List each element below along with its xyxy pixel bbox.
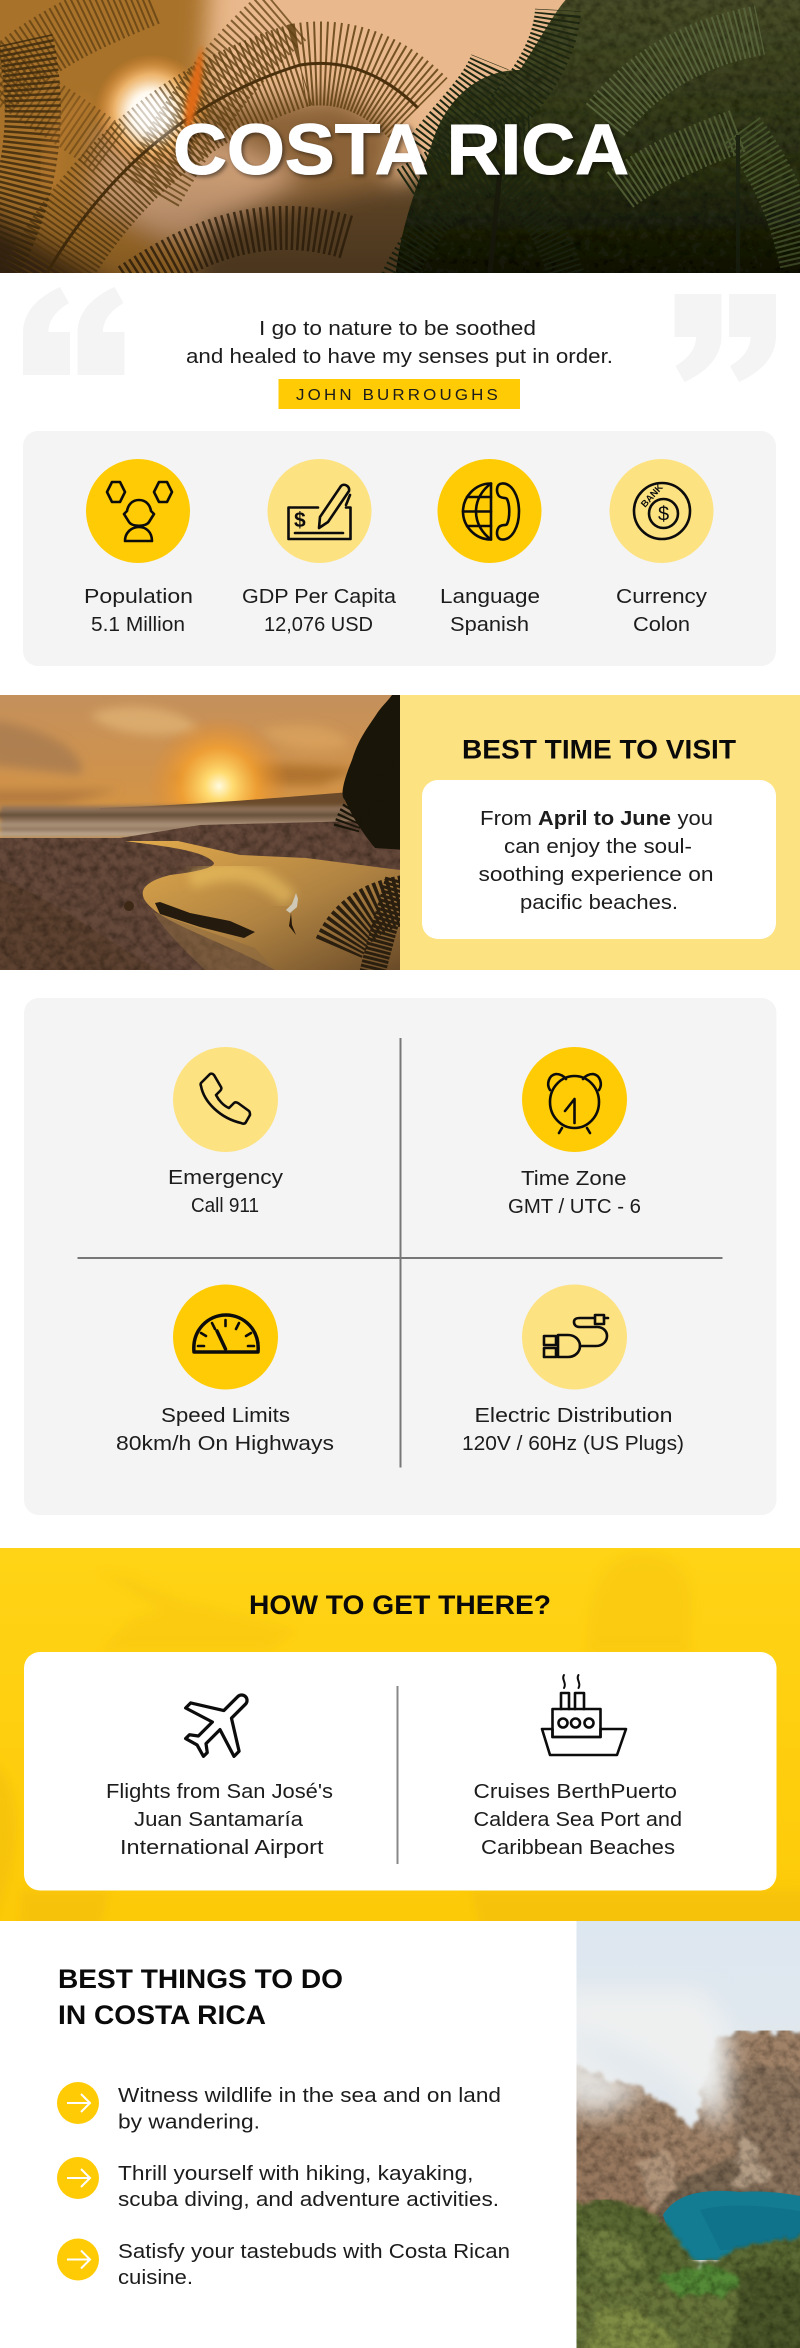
heading: best things to do — [58, 1964, 343, 2030]
icon: arrow — [67, 2094, 90, 2112]
transport: flights: Juan Santamaría — [134, 1809, 304, 1831]
fact: language — [438, 459, 542, 636]
transport: cruises: Cruises BerthPuerto — [474, 1781, 677, 1803]
info: speed limits: 80km/h On Highways — [116, 1433, 334, 1455]
quote author tag — [278, 379, 520, 409]
fact: GDP: 12,076 USD — [264, 614, 373, 636]
icon: globe and phone — [463, 483, 519, 540]
transport: flights: International Airport — [120, 1837, 324, 1859]
panel: best time to visit — [400, 695, 800, 970]
mountain — [576, 2030, 800, 2230]
transport: cruises: Caribbean Beaches — [481, 1837, 675, 1859]
distant headland — [100, 792, 348, 810]
fact: GDP: GDP Per Capita — [242, 586, 397, 608]
transport: cruises — [474, 1675, 682, 1859]
card — [24, 1652, 776, 1890]
icon: bank coin: $ — [658, 504, 669, 526]
info: speed limits: Speed Limits — [161, 1405, 290, 1427]
icon: cheque and pen: $ — [294, 509, 306, 532]
card text: you — [678, 808, 713, 830]
crater lake — [663, 2191, 800, 2260]
card text: can enjoy the soul- — [504, 836, 692, 858]
panel: how to get there — [0, 1548, 800, 1930]
card text — [478, 808, 714, 914]
icon: closing quote mark — [674, 294, 776, 382]
list item: wildlife — [57, 2082, 501, 2134]
fact: currency: Colon — [633, 614, 690, 636]
icon: arrow — [67, 2250, 90, 2268]
quote section — [23, 287, 776, 409]
icon: cheque and pen — [288, 485, 350, 539]
log — [155, 902, 255, 938]
info: speed limits — [116, 1284, 334, 1455]
fact: language: Language — [440, 586, 540, 608]
hero banner photo — [0, 0, 800, 273]
foliage — [576, 2200, 800, 2348]
palm fronds left — [0, 0, 418, 285]
tidal stream — [125, 841, 400, 970]
icon: power plug — [544, 1315, 608, 1357]
panel: practical info — [24, 998, 776, 1515]
fact: currency — [610, 459, 714, 636]
card — [422, 780, 776, 939]
list item: cuisine: cuisine. — [118, 2267, 193, 2289]
info: emergency: Emergency — [168, 1167, 283, 1189]
fog — [560, 1990, 730, 2130]
fact: currency: Currency — [616, 586, 707, 608]
fact: language: Spanish — [450, 614, 529, 636]
icon: bank coin — [634, 482, 690, 539]
heron — [286, 893, 298, 935]
palm silhouette — [342, 695, 400, 850]
sea — [0, 806, 400, 838]
quote text — [186, 318, 613, 368]
heading: best things to do: IN COSTA RICA — [58, 2000, 266, 2030]
info: electric distribution — [462, 1284, 684, 1455]
panel: country facts — [23, 431, 776, 666]
icon: alarm clock — [548, 1074, 601, 1133]
icon: bank coin: BANK — [639, 482, 666, 510]
list item: adventure: scuba diving, and adventure activities. — [118, 2189, 499, 2211]
card text: April to June — [538, 808, 671, 830]
photo: volcano crater lake — [576, 1921, 800, 2348]
card text: From — [480, 808, 532, 830]
quote author tag: JOHN BURROUGHS — [296, 387, 501, 404]
yellow background with faint travel photo — [0, 1548, 800, 1930]
heading: HOW TO GET THERE? — [249, 1590, 551, 1620]
right forest — [395, 0, 800, 280]
icon: ship — [542, 1675, 626, 1755]
photo: sunset beach — [0, 690, 405, 975]
icon: speedometer — [194, 1315, 258, 1352]
title: COSTA RICA — [173, 111, 629, 190]
list item: cuisine — [57, 2238, 510, 2289]
fact: population — [84, 459, 193, 636]
quote text: I go to nature to be soothed — [259, 318, 536, 340]
info: time zone: GMT / UTC - 6 — [508, 1196, 641, 1218]
info: electric distribution: 120V / 60Hz (US Plugs) — [462, 1433, 684, 1455]
info: electric distribution: Electric Distribution — [474, 1405, 672, 1427]
list item: wildlife: Witness wildlife in the sea and on land — [118, 2085, 501, 2107]
list item: wildlife: by wandering. — [118, 2112, 260, 2134]
info: time zone: Time Zone — [521, 1168, 626, 1190]
heading: BEST TIME TO VISIT — [462, 734, 737, 764]
fact: GDP — [242, 459, 397, 636]
icon: arrow — [67, 2169, 90, 2187]
transport: flights: Flights from San José's — [106, 1781, 333, 1803]
sand — [0, 820, 400, 970]
icon: phone handset — [201, 1074, 250, 1124]
heading: best things to do: BEST THINGS TO DO — [58, 1964, 343, 1994]
palm reflection — [338, 880, 405, 975]
fact: population: Population — [84, 586, 193, 608]
fact: population: 5.1 Million — [91, 614, 185, 636]
palm trees right — [395, 10, 800, 285]
transport: flights — [106, 1672, 333, 1859]
list item: cuisine: Satisfy your tastebuds with Costa Rican — [118, 2241, 510, 2263]
info: emergency — [168, 1047, 283, 1217]
list item: adventure: Thrill yourself with hiking, kayaking, — [118, 2163, 474, 2185]
sand edge highlight — [153, 912, 275, 970]
quote text: and healed to have my senses put in order. — [186, 346, 613, 368]
list item: adventure — [57, 2157, 499, 2211]
transport: cruises: Caldera Sea Port and — [474, 1809, 682, 1831]
info: time zone — [508, 1047, 641, 1218]
card text: soothing experience on — [478, 864, 714, 886]
card text: pacific beaches. — [520, 892, 678, 914]
info: emergency: Call 911 — [191, 1195, 259, 1217]
icon: airplane — [170, 1672, 270, 1772]
icon: opening quote mark — [23, 287, 124, 375]
icon: people — [107, 482, 172, 541]
